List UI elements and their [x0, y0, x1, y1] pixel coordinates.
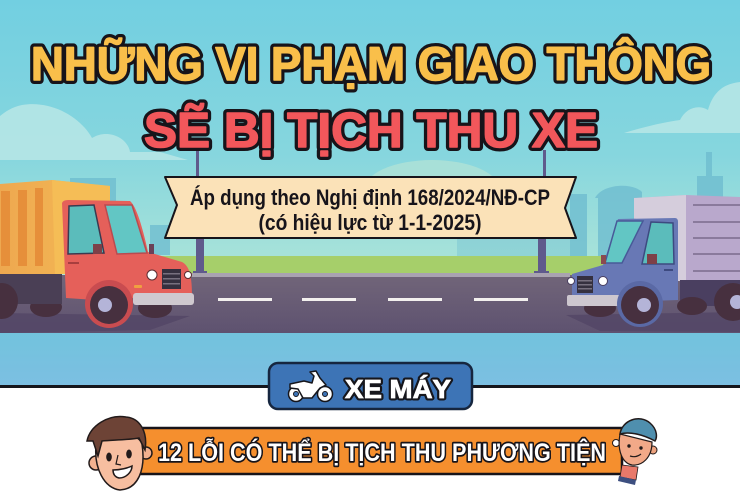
lower blue band [0, 333, 740, 386]
grass strip [150, 256, 610, 276]
blue truck [566, 195, 740, 332]
sky background [0, 0, 740, 280]
banner: 12 lỗi: 12 LỖI CÓ THỂ BỊ TỊCH THU PHƯƠNG TIỆN [158, 437, 606, 467]
clouds left [0, 104, 188, 160]
banner: 12 lỗi [138, 428, 622, 474]
icon: motorcycle [288, 371, 332, 402]
ribbon: decree note [165, 177, 576, 238]
white lower section [0, 388, 740, 495]
red truck [0, 180, 194, 333]
icon: worker's face [612, 419, 657, 485]
badge: xe máy: XE MÁY [345, 374, 451, 404]
badge: xe máy: XE MÁY [345, 374, 451, 404]
badge: xe máy [269, 363, 472, 409]
title line 1: NHỮNG VI PHẠM GIAO THÔNG [31, 37, 711, 90]
road [0, 273, 740, 333]
title line 1: NHỮNG VI PHẠM GIAO THÔNG [31, 37, 711, 90]
clouds right [624, 82, 740, 133]
ribbon: decree note: (có hiệu lực từ 1-1-2025) [258, 210, 482, 235]
icon: man's face [87, 417, 152, 490]
distant pale hill [364, 160, 500, 220]
city skyline [70, 152, 723, 260]
ribbon: decree note: Áp dụng theo Nghị định 168/2024/NĐ-CP [190, 185, 550, 210]
title line 2: SẼ BỊ TỊCH THU XE [144, 104, 598, 158]
title line 2: SẼ BỊ TỊCH THU XE [144, 104, 598, 158]
lamp posts [193, 150, 549, 274]
